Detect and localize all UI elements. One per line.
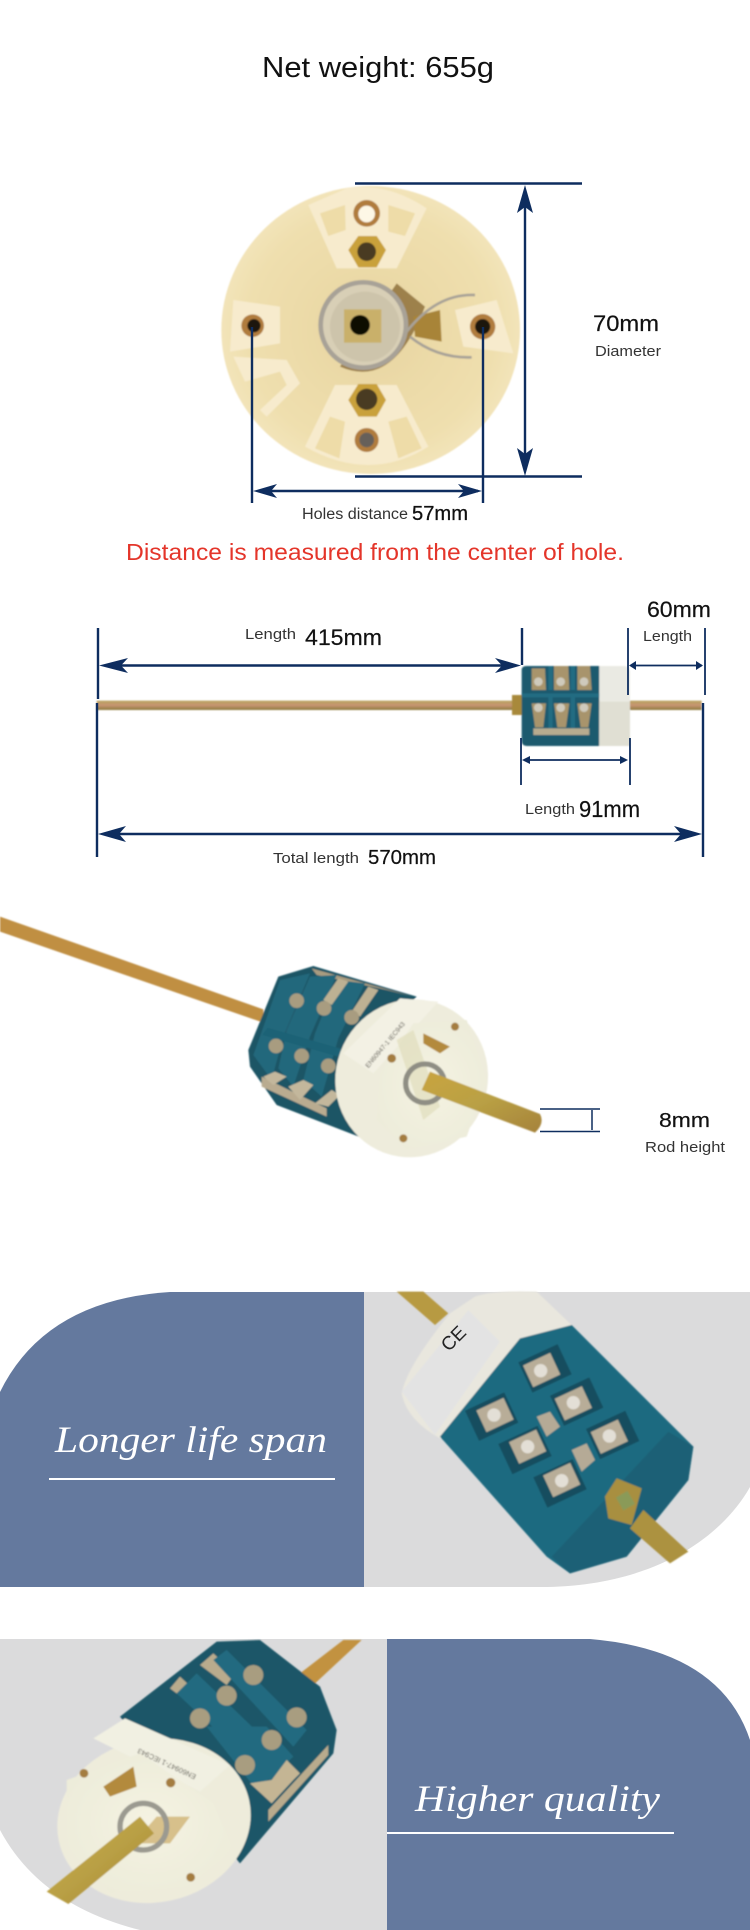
label: 70mm diameter: Diameter [595, 343, 661, 360]
photo: switch angled view [0, 917, 542, 1179]
label: 415mm length: Length [245, 626, 296, 643]
label: holes distance 57mm: Holes distance [302, 506, 408, 523]
label: holes distance 57mm: 57mm [412, 503, 468, 525]
panel: higher quality [0, 1639, 750, 1930]
label: total length 570mm: 570mm [368, 847, 436, 869]
label: 60mm length [643, 597, 711, 645]
label: 91mm length: 91mm [579, 796, 640, 822]
label: 8mm rod height: 8mm [659, 1110, 710, 1132]
dimension: 415mm arrow [98, 628, 522, 699]
underline [49, 1478, 335, 1480]
label: 60mm length: 60mm [647, 597, 711, 622]
dimension: 91mm arrow [521, 738, 630, 785]
photo: switch face [42, 1640, 362, 1921]
photo: switch side view [97, 666, 702, 746]
underline [387, 1832, 674, 1834]
label: 91mm length: Length [525, 801, 575, 818]
label: 91mm length [525, 796, 640, 822]
gray photo background [364, 1292, 750, 1587]
title: net weight: Net weight: 655g [262, 52, 494, 84]
label: total length 570mm: Total length [273, 850, 359, 867]
label: 60mm length: Length [643, 628, 692, 645]
label: 8mm rod height: Rod height [645, 1139, 726, 1156]
logo: CE mark: CE [437, 1322, 471, 1356]
label: 70mm diameter: 70mm [593, 311, 659, 336]
dimension: holes distance arrow [252, 327, 483, 503]
dimension: 60mm arrow [628, 628, 705, 695]
label: 415mm length: 415mm [305, 625, 382, 650]
label: 8mm rod height [645, 1110, 726, 1156]
dimension: total length arrow [97, 703, 703, 857]
dimension: 70mm diameter arrow [355, 184, 582, 476]
photo: switch angled view: EN60947-1 IEC943 [365, 1021, 407, 1070]
heading: longer life span: Longer life span [54, 1420, 327, 1461]
blue panel [387, 1639, 750, 1930]
label: 415mm length [245, 625, 382, 650]
gray photo background [0, 1639, 387, 1930]
panel: longer life span [0, 1291, 750, 1587]
dimension: rod height [540, 1109, 600, 1132]
label: holes distance 57mm [302, 503, 468, 525]
label: total length 570mm [273, 847, 436, 869]
heading: higher quality: Higher quality [414, 1779, 661, 1820]
label: 70mm diameter [593, 311, 661, 360]
photo: switch terminals [397, 1291, 693, 1573]
photo: switch end view [221, 186, 520, 474]
blue panel [0, 1292, 364, 1587]
photo: switch face: EN60947-1 IEC943 [136, 1746, 198, 1781]
note: measurement: Distance is measured from the center of hole. [126, 539, 624, 565]
